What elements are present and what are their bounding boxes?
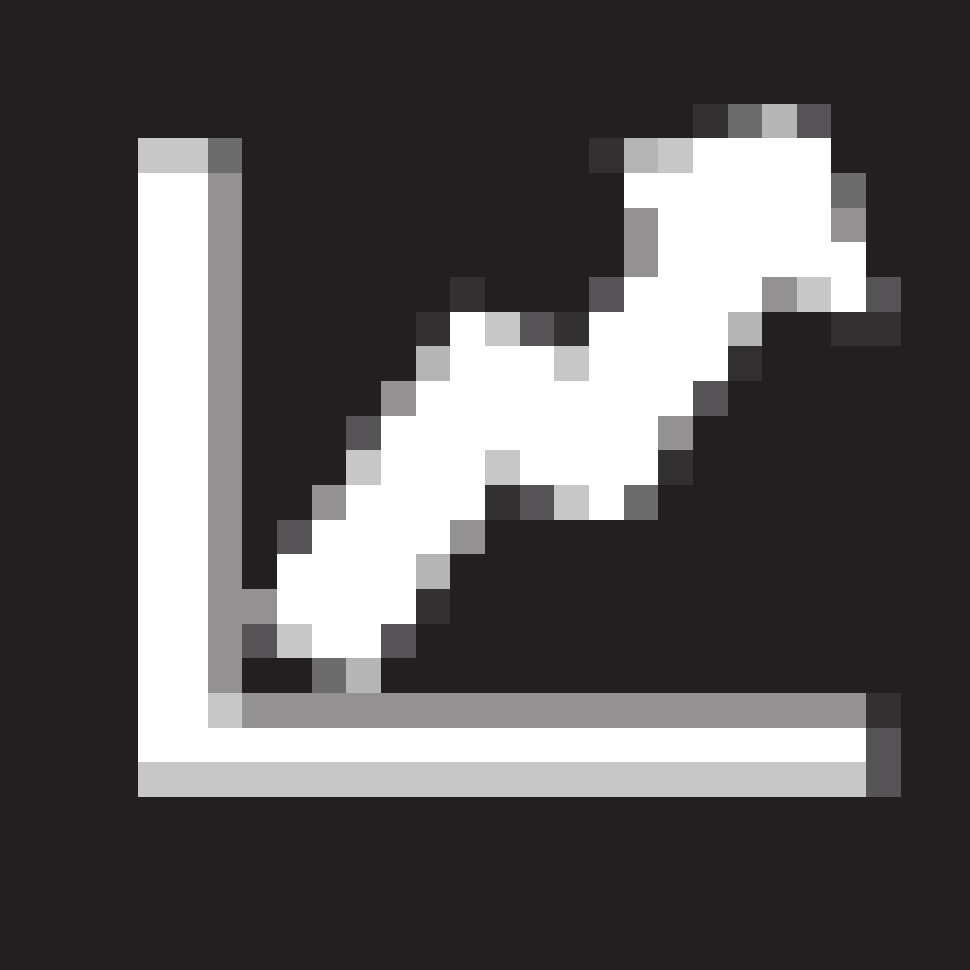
rising trend arrow [277, 104, 901, 693]
chart axes [138, 138, 901, 797]
